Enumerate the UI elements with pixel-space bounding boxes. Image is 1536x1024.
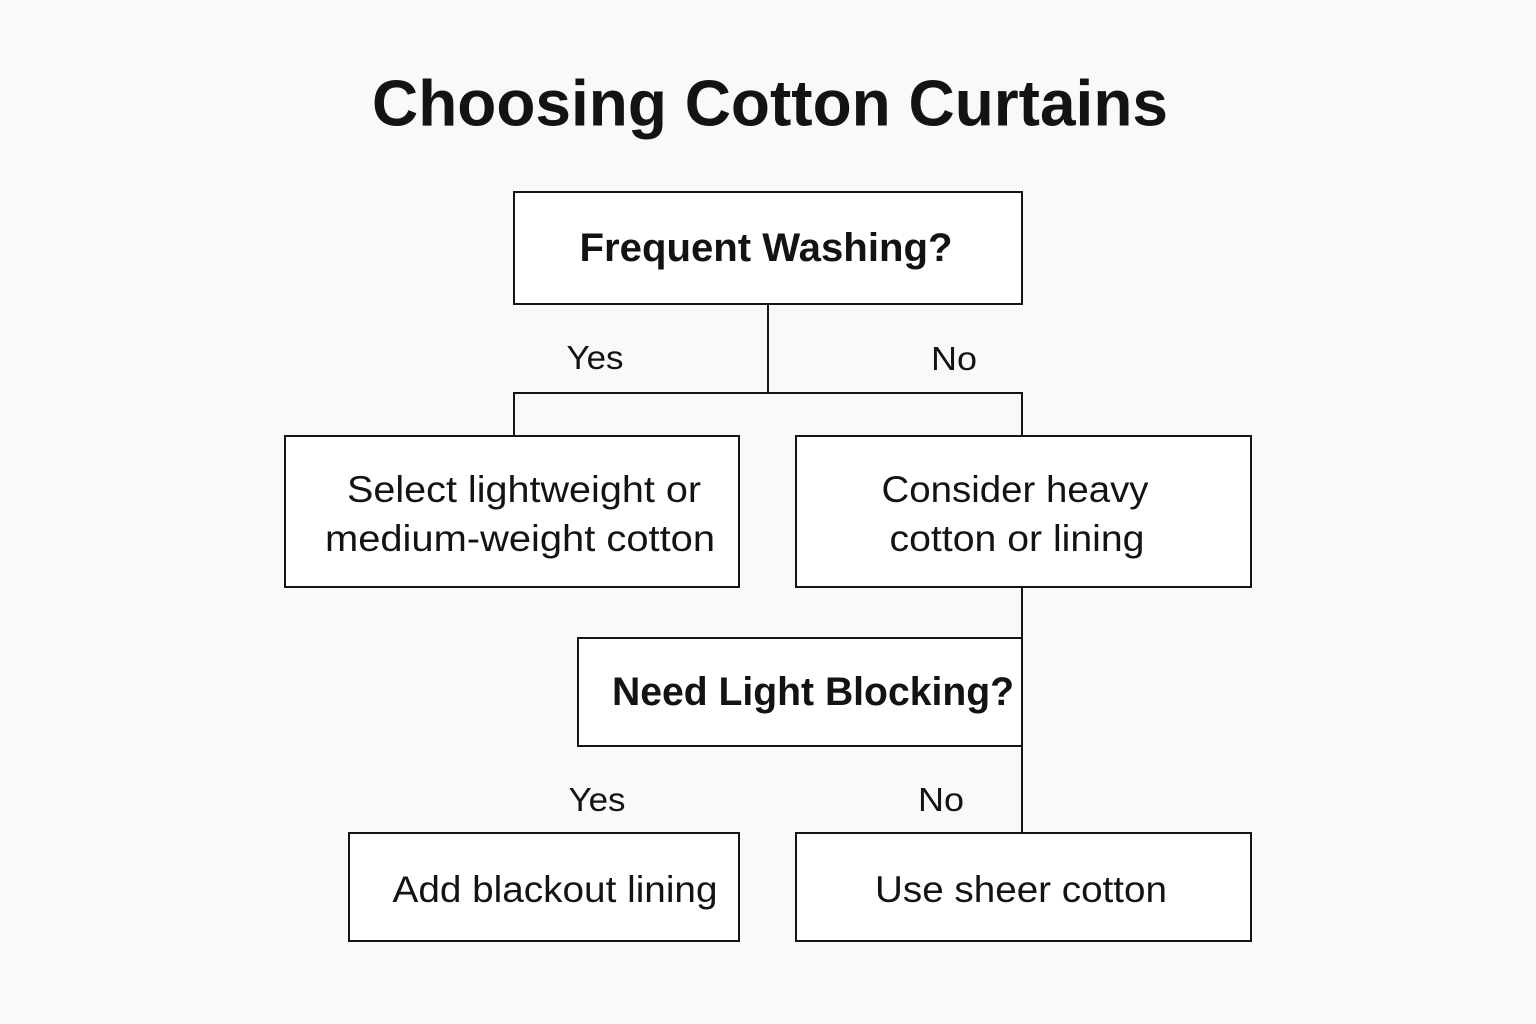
connector: heavy cotton to second question and sheer cotton [1021, 588, 1023, 833]
box: Add blackout lining [349, 833, 739, 941]
box: Add blackout lining: Add blackout lining [392, 869, 718, 910]
box: Use sheer cotton [796, 833, 1251, 941]
box: Frequent Washing?: Frequent Washing? [580, 226, 952, 270]
box: lightweight cotton: medium-weight cotton [325, 518, 715, 559]
box: heavy cotton: cotton or lining [890, 518, 1144, 559]
box: lightweight cotton [285, 436, 739, 587]
title: Choosing Cotton Curtains [372, 66, 1168, 140]
label: No (first): No [931, 340, 977, 377]
label: Yes (second): Yes [568, 781, 626, 818]
box: Need Light Blocking? [578, 638, 1022, 746]
box: Use sheer cotton: Use sheer cotton [875, 869, 1167, 910]
box: Frequent Washing? [514, 192, 1022, 304]
box: heavy cotton: Consider heavy [882, 469, 1149, 510]
box: lightweight cotton: Select lightweight or [347, 469, 701, 510]
box: Need Light Blocking?: Need Light Blocking? [612, 670, 1014, 714]
label: Yes (first): Yes [566, 339, 624, 376]
connector: first question to branches [514, 304, 1022, 435]
box: heavy cotton [796, 436, 1251, 587]
label: No (second): No [918, 781, 964, 818]
